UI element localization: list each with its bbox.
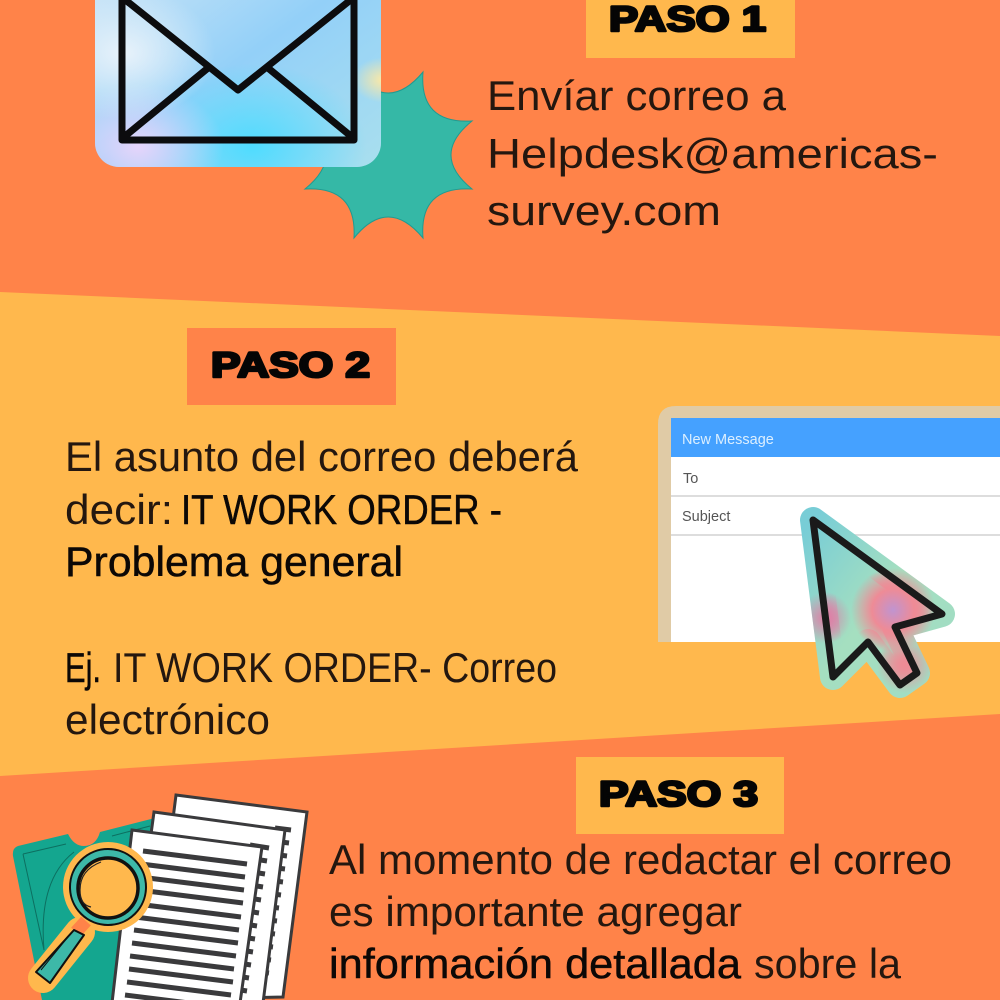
panel: yellow band for step 2 bbox=[0, 292, 1000, 776]
text block: step 2: El asunto del correo deberá bbox=[65, 433, 579, 480]
email window mockup: New Message bbox=[682, 432, 774, 448]
text block: step 1: survey.com bbox=[487, 187, 721, 234]
text block: step 3: sobre la bbox=[754, 940, 902, 987]
text block: step 3: Al momento de redactar el correo bbox=[329, 836, 952, 883]
text block: step 2 bbox=[65, 433, 579, 743]
back page bbox=[150, 795, 307, 1000]
text block: step 2: electrónico bbox=[65, 696, 270, 743]
heading: PASO 1: PASO 1 bbox=[609, 0, 766, 39]
icon: teal folder bbox=[13, 818, 160, 1000]
heading: PASO 1 bbox=[586, 0, 795, 58]
heading: PASO 2 bbox=[187, 328, 396, 405]
middle page bbox=[128, 812, 285, 1000]
heading: PASO 3: PASO 3 bbox=[599, 775, 758, 814]
email window mockup: Subject bbox=[682, 509, 730, 525]
text block: step 3 bbox=[329, 836, 952, 987]
text block: step 1: Envíar correo a bbox=[487, 72, 787, 119]
text block: step 2: decir: bbox=[65, 486, 173, 533]
text block: step 2: IT WORK ORDER- Correo bbox=[113, 644, 557, 691]
heading: PASO 3 bbox=[576, 757, 784, 834]
email window mockup bbox=[658, 406, 1000, 642]
email window mockup: To bbox=[683, 471, 698, 487]
text block: step 2: IT WORK ORDER - bbox=[181, 486, 502, 533]
icon: stack of documents bbox=[112, 795, 307, 1000]
front page bbox=[112, 830, 262, 1000]
heading: PASO 2: PASO 2 bbox=[211, 346, 370, 385]
text block: step 2: Ej. bbox=[65, 644, 101, 691]
text block: step 2: Problema general bbox=[65, 538, 403, 585]
icon: magnifying glass bbox=[36, 842, 153, 983]
text block: step 3: información detallada bbox=[329, 940, 742, 987]
icon: cursor arrow bbox=[813, 520, 942, 685]
text block: step 3: es importante agregar bbox=[329, 888, 742, 935]
icon: envelope card bbox=[95, 0, 381, 167]
text block: step 1 bbox=[487, 72, 938, 234]
text block: step 1: Helpdesk@americas- bbox=[487, 130, 938, 177]
icon: teal starburst bbox=[305, 72, 472, 238]
